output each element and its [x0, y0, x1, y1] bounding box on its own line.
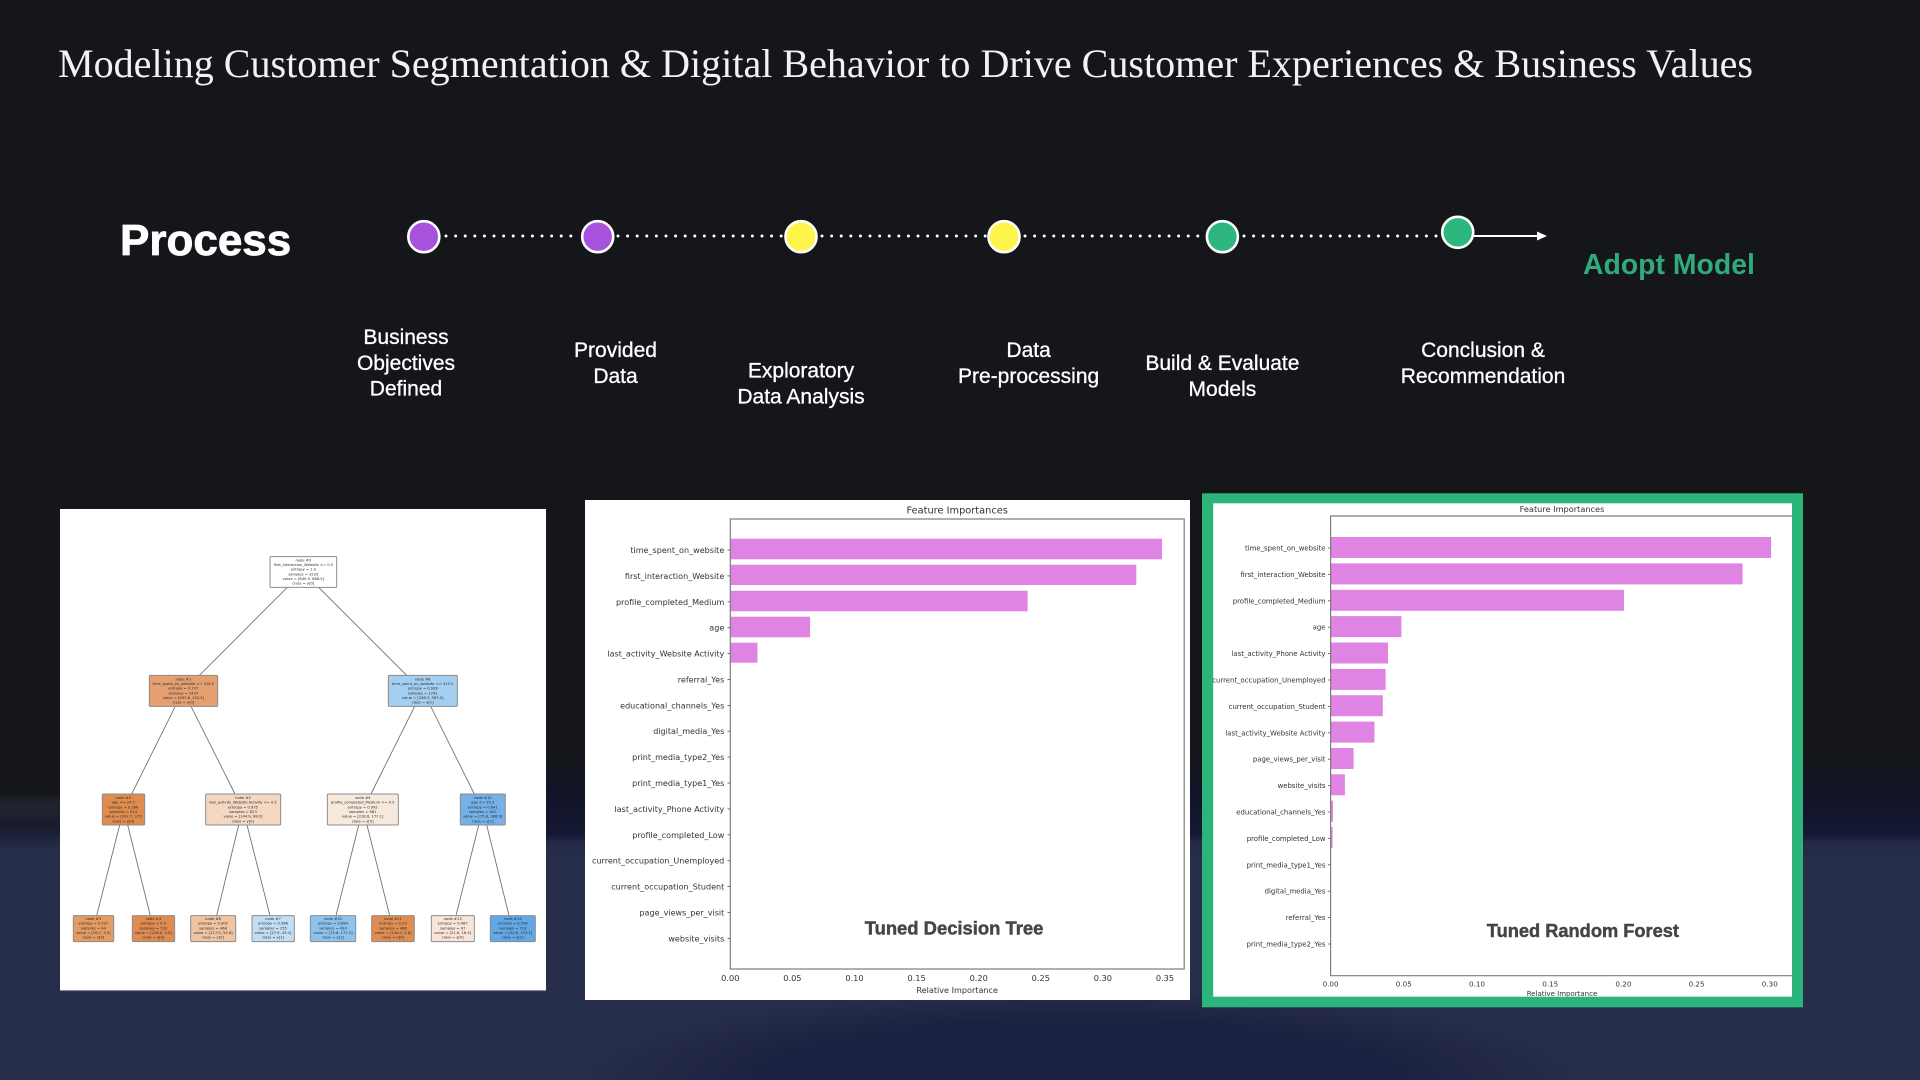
- node 14: [490, 916, 535, 942]
- node 13: entropy = 0.987: [438, 922, 468, 926]
- node 8: entropy = 0.926: [408, 687, 438, 691]
- node 8: [388, 675, 457, 706]
- node 4: value = [226.0, 0.0]: [135, 931, 172, 935]
- node 6: class = y[0]: [202, 936, 224, 940]
- feature labels: referral_Yes: [678, 676, 724, 684]
- node 9: entropy = 0.992: [348, 805, 378, 809]
- x tick labels: 0.15: [1542, 979, 1558, 988]
- node 5: [206, 794, 281, 825]
- node 9: node #9: [355, 796, 371, 800]
- chart title: Feature Importances: [1520, 504, 1604, 514]
- feature labels: first_interaction_Website: [625, 572, 724, 581]
- node 7: class = y[1]: [262, 936, 284, 940]
- feature labels: [592, 546, 725, 943]
- node 13: [431, 916, 474, 942]
- feature labels: digital_media_Yes: [1265, 888, 1326, 896]
- x tick labels: [1323, 982, 1778, 986]
- node 4: entropy = 0.0: [141, 922, 167, 926]
- node 7: samples = 155: [259, 926, 287, 930]
- x tick labels: 0.10: [1469, 979, 1485, 988]
- node 5: class = y[0]: [232, 819, 254, 823]
- node 13: class = y[0]: [442, 936, 464, 940]
- node 11: value = [144.0, 5.6]: [375, 931, 412, 935]
- feature labels: current_occupation_Student: [1229, 703, 1326, 711]
- node 9: samples = 981: [349, 810, 376, 814]
- node 4: class = y[0]: [142, 936, 165, 940]
- model name: Tuned Decision Tree: [865, 918, 1043, 938]
- step label: Data Pre-processing: Pre-processing: [958, 365, 1099, 388]
- node 10: samples = 493: [319, 926, 347, 930]
- x tick labels: 0.00: [1323, 979, 1339, 988]
- step label: Provided Data: Data: [593, 365, 638, 388]
- node 10: entropy = 0.884: [318, 922, 349, 926]
- node 13: value = [21.6, 16.4]: [434, 931, 472, 935]
- node 11: [372, 916, 414, 942]
- node 8: class = y[1]: [412, 701, 434, 705]
- x axis title: Relative Importance: [1527, 990, 1597, 998]
- x tick labels: 0.25: [1689, 979, 1705, 988]
- step marker: Build & Evaluate Models: [1207, 221, 1238, 252]
- node 4: [132, 916, 175, 942]
- y tick marks: [728, 550, 730, 938]
- node 12: age <= 25.5: [471, 801, 494, 805]
- node 11: entropy = 0.23: [379, 922, 408, 926]
- node 9: value = [218.6, 177.1]: [342, 815, 384, 819]
- node 12: [460, 794, 505, 825]
- x tick labels: 0.15: [907, 973, 926, 983]
- feature labels: profile_completed_Medium: [1233, 597, 1326, 605]
- node 14: entropy = 0.548: [498, 922, 528, 926]
- node 6: [191, 916, 236, 942]
- node 11: node #11: [384, 917, 402, 921]
- x tick labels: 0.30: [1094, 973, 1112, 983]
- node 5: node #5: [235, 796, 251, 800]
- axes: [1331, 516, 1792, 976]
- node 10: class = y[1]: [322, 936, 344, 940]
- feature labels: current_occupation_Unemployed: [592, 857, 724, 866]
- node 7: value = [27.9, 43.4]: [255, 931, 292, 935]
- node 13: samples = 97: [440, 926, 466, 930]
- node 14: value = [54.6, 373.1]: [493, 931, 533, 935]
- node 8: time_spent_on_website <= 415.5: [392, 682, 453, 686]
- process timeline: [408, 217, 1547, 252]
- step marker: Exploratory Data Analysis: [786, 221, 816, 252]
- node 1: node #1: [175, 677, 191, 681]
- node 0: node #0: [295, 558, 312, 562]
- step marker: Conclusion & Recommendation: [1442, 217, 1473, 248]
- node 13: node #13: [444, 917, 462, 921]
- step label: Conclusion & Recommendation: Recommendation: [1401, 365, 1565, 388]
- x tick labels: 0.00: [721, 973, 739, 983]
- feature labels: print_media_type2_Yes: [632, 753, 724, 762]
- dotted connectors: [446, 234, 1441, 238]
- node 2: value = [242.7, 3.5]: [105, 815, 142, 819]
- heading: Process: Process: [120, 216, 291, 265]
- panel: Tuned Random Forest feature importance chart (highlighted): [1202, 493, 1803, 1007]
- step label: Conclusion & Recommendation: Conclusion &: [1421, 339, 1545, 362]
- node 10: value = [74.6, 171.5]: [313, 931, 353, 935]
- bars: [730, 539, 1162, 663]
- feature labels: page_views_per_visit: [639, 908, 724, 918]
- model name: Tuned Random Forest: [1487, 920, 1679, 941]
- feature labels: website_visits: [668, 934, 724, 943]
- node 1: [149, 675, 218, 706]
- axes frame: [730, 519, 1184, 969]
- x tick labels: 0.35: [1156, 973, 1174, 983]
- feature labels: website_visits: [1278, 782, 1326, 790]
- node 12: entropy = 0.641: [468, 805, 498, 809]
- feature labels: page_views_per_visit: [1253, 756, 1326, 764]
- feature labels: referral_Yes: [1286, 914, 1326, 922]
- feature labels: last_activity_Website Activity: [607, 650, 725, 659]
- node 12: node #12: [474, 796, 492, 800]
- node 3: samples = 94: [81, 926, 107, 930]
- node 14: node #14: [504, 917, 522, 921]
- step label: Business Objectives Defined: Defined: [370, 378, 442, 401]
- feature labels: age: [709, 624, 724, 633]
- x tick labels: 0.25: [1032, 973, 1050, 983]
- node 7: node #7: [265, 917, 282, 921]
- node 1: class = y[0]: [172, 701, 195, 705]
- node 0: first_interaction_Website <= 0.5: [274, 563, 333, 567]
- feature labels: educational_channels_Yes: [620, 701, 724, 710]
- feature labels: profile_completed_Low: [632, 831, 725, 840]
- node 6: node #6: [205, 917, 222, 921]
- step label: Build & Evaluate Models: Build & Evaluate: [1145, 352, 1299, 375]
- node 1: value = [597.6, 155.5]: [163, 696, 205, 700]
- node 2: samples = 814: [110, 810, 138, 814]
- feature labels: current_occupation_Unemployed: [1212, 676, 1326, 684]
- node 1: samples = 1437: [168, 691, 199, 695]
- node 6: entropy = 0.902: [198, 922, 228, 926]
- x tick labels: 0.20: [1615, 979, 1632, 988]
- x tick labels: 0.05: [783, 973, 802, 983]
- feature labels: time_spent_on_website: [1245, 544, 1326, 552]
- step label: Business Objectives Defined: Business: [363, 326, 449, 349]
- node 4: samples = 720: [140, 926, 168, 930]
- tree edges: [97, 587, 509, 916]
- node 0: samples = 3229: [288, 572, 319, 576]
- x tick labels: 0.20: [970, 973, 988, 983]
- feature labels: educational_channels_Yes: [1236, 808, 1326, 816]
- feature labels: first_interaction_Website: [1240, 571, 1326, 579]
- node 5: value = [144.9, 98.0]: [223, 815, 263, 819]
- node 11: class = y[0]: [382, 936, 404, 940]
- node 12: value = [75.8, 388.9]: [463, 815, 503, 819]
- step label: Provided Data: Provided: [574, 339, 657, 362]
- feature labels: last_activity_Website Activity: [1225, 729, 1326, 737]
- node 9: profile_completed_Medium <= 0.5: [331, 801, 394, 805]
- node 2: entropy = 0.286: [108, 805, 139, 809]
- x tick labels: 0.05: [1396, 979, 1412, 988]
- node 9: [327, 794, 398, 825]
- feature labels: print_media_type2_Yes: [1247, 940, 1326, 948]
- node 6: value = [117.0, 54.6]: [193, 931, 233, 935]
- node 10: node #10: [324, 917, 343, 921]
- title: Modeling Customer Segmentation & Digital Behavior to Drive Customer Experiences & Business Values: [58, 41, 1753, 86]
- node 10: [310, 916, 356, 942]
- feature labels: digital_media_Yes: [653, 727, 724, 736]
- node 0: entropy = 1.0: [291, 568, 317, 572]
- feature labels: current_occupation_Student: [611, 883, 724, 892]
- panel: Tuned Decision Tree feature importance chart: [585, 500, 1190, 1000]
- arrow to Adopt Model: [1474, 232, 1547, 240]
- feature labels: last_activity_Phone Activity: [614, 805, 725, 814]
- step label: Business Objectives Defined: Objectives: [357, 352, 455, 375]
- node 2: age <= 24.5: [112, 801, 135, 805]
- node 0: class = y[0]: [292, 582, 315, 586]
- node 8: samples = 1791: [408, 691, 438, 695]
- node 2: node #2: [115, 796, 131, 800]
- node 12: samples = 810: [469, 810, 497, 814]
- feature labels: [1212, 544, 1326, 948]
- node 6: samples = 468: [199, 926, 227, 930]
- node 8: value = [298.3, 587.0]: [402, 696, 444, 700]
- x tick labels: 0.10: [845, 973, 864, 983]
- step marker: Provided Data: [582, 221, 613, 252]
- node 1: time_spent_on_website <= 418.5: [153, 682, 214, 686]
- feature labels: age: [1313, 624, 1326, 632]
- node 3: class = y[0]: [82, 936, 105, 940]
- node 5: last_activity_Website Activity <= 0.5: [209, 801, 277, 805]
- node 2: [102, 794, 145, 825]
- node 0: [270, 557, 337, 587]
- node 9: class = y[0]: [352, 819, 374, 823]
- step marker: Business Objectives Defined: [408, 221, 439, 252]
- node 12: class = y[1]: [472, 819, 494, 823]
- node 11: samples = 488: [379, 926, 407, 930]
- node 5: entropy = 0.975: [228, 805, 258, 809]
- step label: Exploratory Data Analysis: Exploratory: [748, 360, 855, 383]
- feature labels: profile_completed_Medium: [616, 598, 724, 607]
- step label: Data Pre-processing: Data: [1006, 339, 1051, 362]
- node 0: value = [840.9, 868.5]: [283, 577, 325, 581]
- step label: Build & Evaluate Models: Models: [1189, 378, 1256, 401]
- panel: decision tree diagram: [60, 509, 546, 991]
- callout: Adopt Model: Adopt Model: [1583, 249, 1755, 281]
- chart title: Feature Importances: [907, 506, 1008, 516]
- node 5: samples = 623: [229, 810, 257, 814]
- x tick labels: 0.30: [1762, 979, 1778, 988]
- node 14: samples = 713: [499, 926, 527, 930]
- feature labels: print_media_type1_Yes: [1247, 861, 1326, 869]
- feature labels: profile_completed_Low: [1247, 835, 1326, 843]
- node 4: node #4: [145, 917, 162, 921]
- node 3: node #3: [85, 917, 102, 921]
- node 14: class = y[1]: [502, 936, 524, 940]
- feature labels: time_spent_on_website: [630, 546, 724, 555]
- x tick labels: [721, 973, 1174, 983]
- bars: [1331, 537, 1771, 848]
- node 3: value = [26.7, 3.5]: [76, 931, 111, 935]
- node 3: entropy = 0.537: [78, 922, 109, 926]
- step marker: Data Pre-processing: [988, 221, 1020, 252]
- step label: Exploratory Data Analysis: Data Analysis: [737, 386, 865, 408]
- feature labels: last_activity_Phone Activity: [1231, 650, 1326, 658]
- node 7: [252, 916, 294, 942]
- feature labels: print_media_type1_Yes: [632, 779, 724, 788]
- node 3: [73, 916, 114, 942]
- node 2: class = y[0]: [112, 819, 135, 823]
- node 7: entropy = 0.966: [258, 922, 289, 926]
- y tick marks: [1328, 548, 1330, 944]
- node 8: node #8: [415, 677, 431, 681]
- node 1: entropy = 0.737: [168, 687, 199, 691]
- x axis title: Relative Importance: [916, 985, 998, 995]
